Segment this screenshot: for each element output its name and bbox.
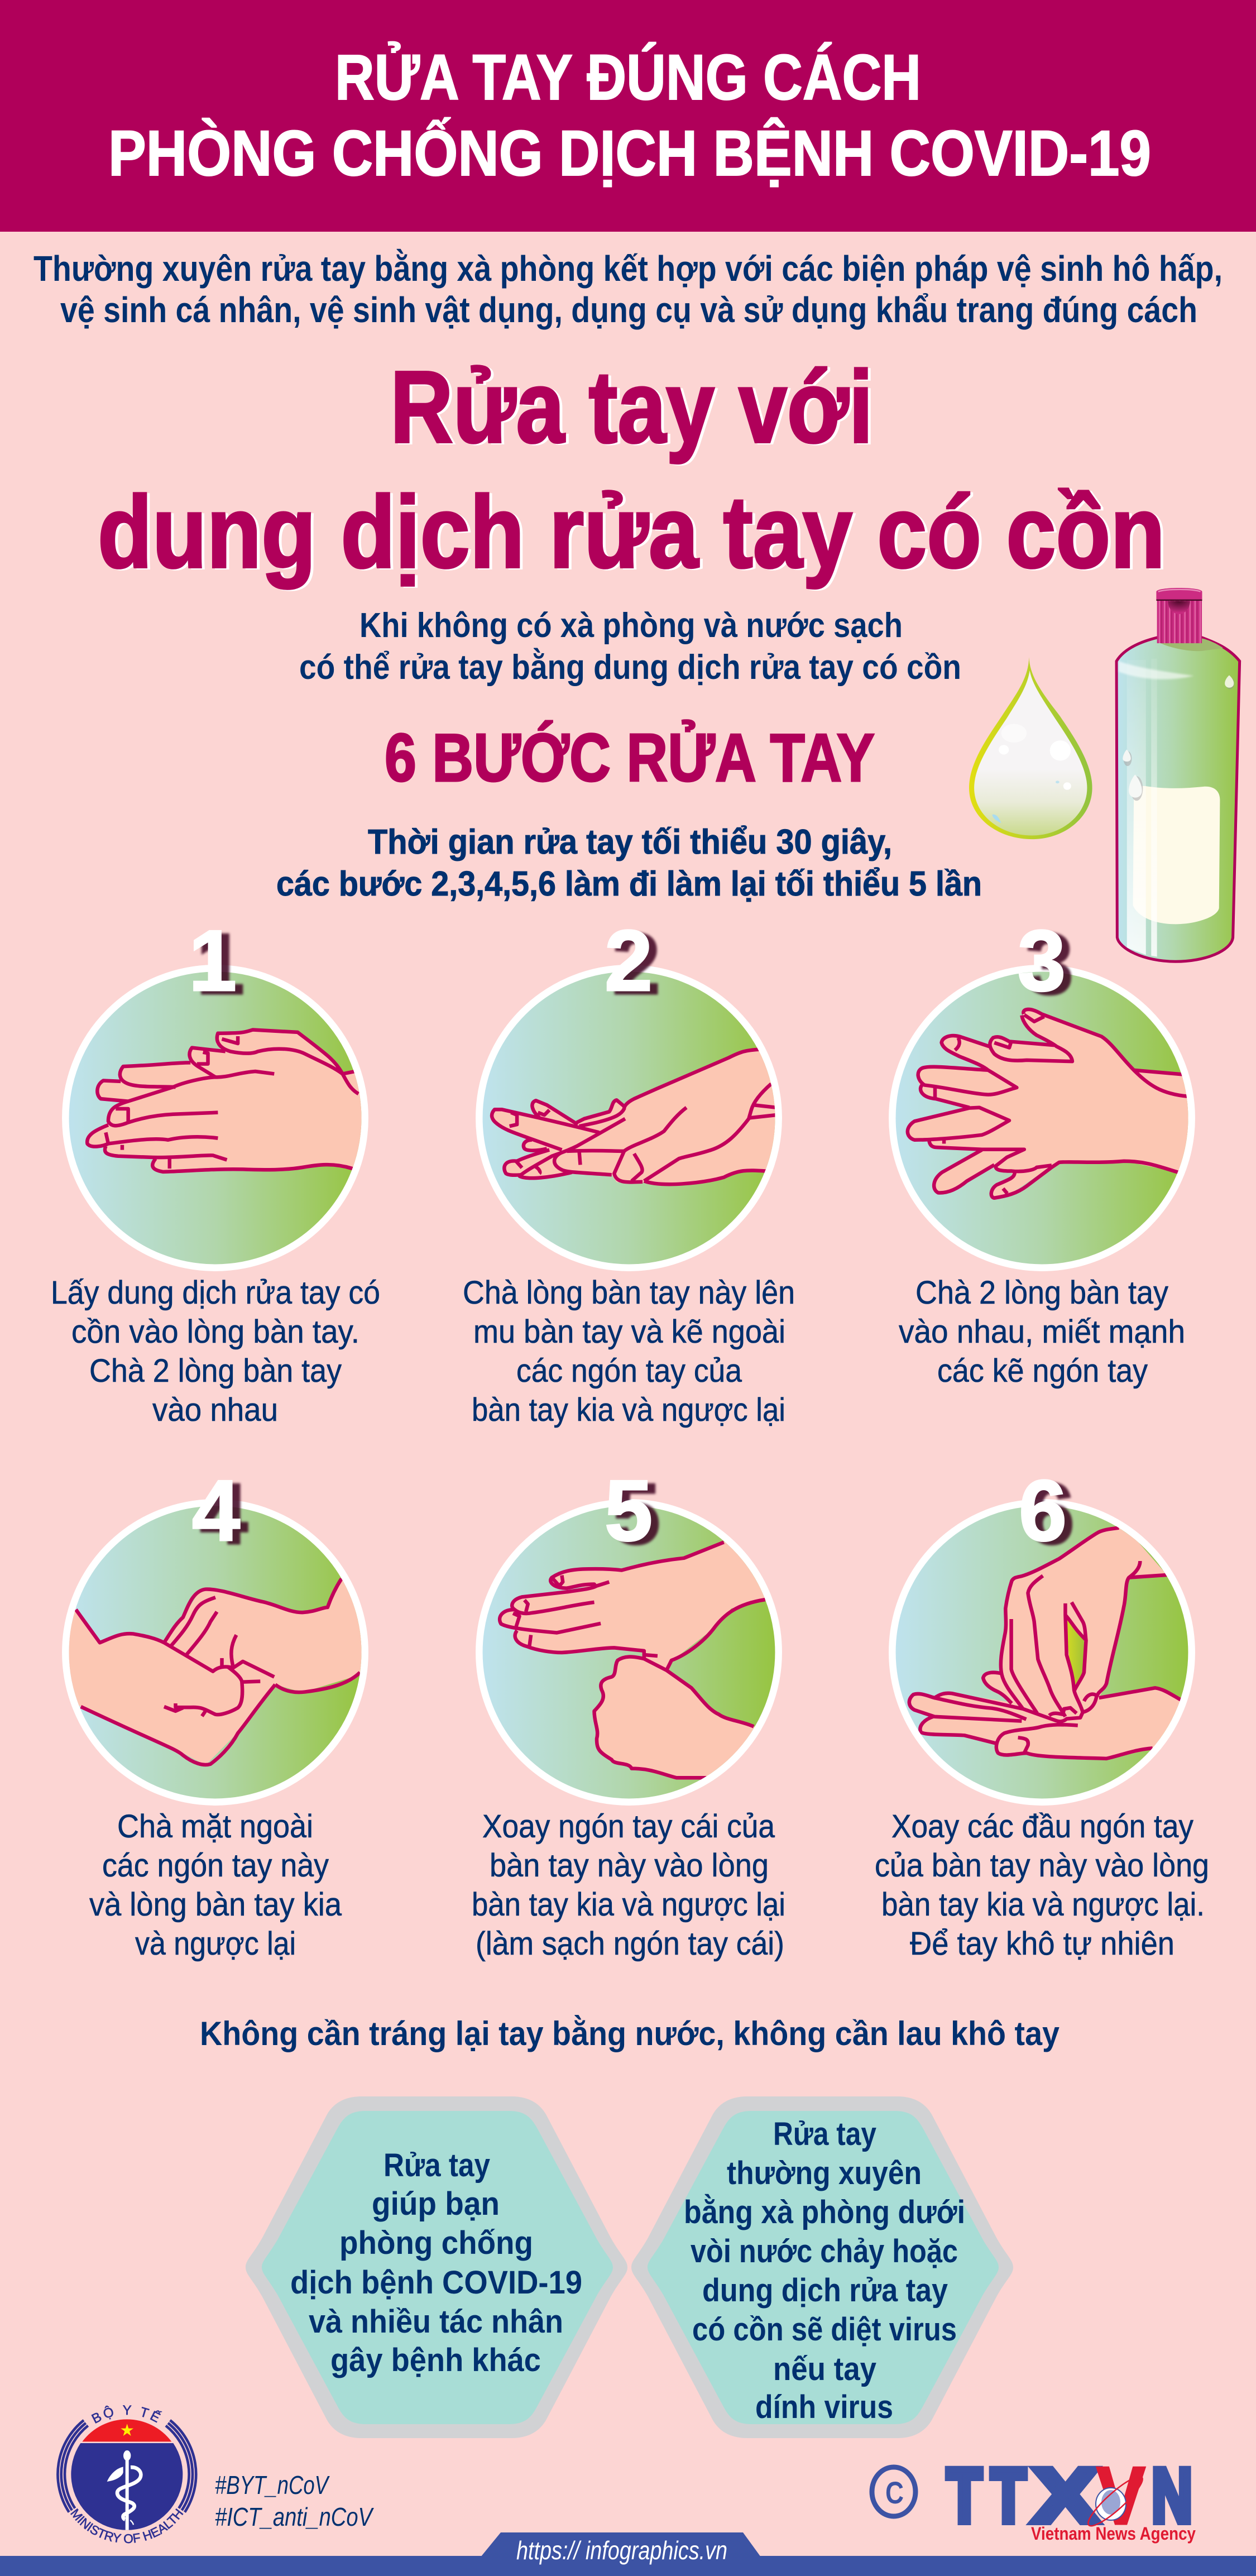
step 3 caption: Chà 2 lòng bàn tay (915, 1275, 1168, 1311)
step 5 circle (479, 1502, 779, 1802)
TTXVN letters: T (947, 2453, 982, 2539)
TTXVN letters: T (991, 2453, 1026, 2539)
step 5 hands (500, 1529, 781, 1778)
title: RỬA TAY ĐÚNG CÁCH (335, 42, 921, 113)
step 2 hands (492, 1050, 779, 1185)
step 6 number: 6 (1019, 1462, 1067, 1559)
step 3 caption (899, 1275, 1185, 1389)
hexagon left text: Rửa tay (383, 2147, 490, 2184)
step 3 hands (908, 1008, 1193, 1198)
bottle body (1116, 638, 1240, 961)
step 5 caption: bàn tay này vào lòng (490, 1847, 769, 1884)
panel: step 3 (892, 912, 1193, 1389)
header band (0, 0, 1256, 232)
logo rings (57, 2420, 196, 2512)
step 5 caption: bàn tay kia và ngược lại (472, 1886, 785, 1923)
step 3 caption: các kẽ ngón tay (937, 1353, 1148, 1389)
hashtags: #ICT_anti_nCoV (215, 2502, 375, 2531)
step 1 caption: cồn vào lòng bàn tay. (71, 1314, 359, 1350)
time note (276, 823, 982, 903)
bottle droplets (1123, 675, 1234, 801)
step 6 caption: bàn tay kia và ngược lại. (881, 1886, 1205, 1923)
step 4 circle (65, 1502, 365, 1802)
panel: step 1 (51, 912, 380, 1428)
copyright mark (872, 2467, 915, 2516)
step 1 caption: Lấy dung dịch rửa tay có (51, 1275, 380, 1311)
main heading (98, 349, 1165, 589)
logo star (121, 2424, 133, 2436)
hexagon left text (290, 2147, 582, 2378)
hexagon left border (246, 2096, 627, 2438)
step 6 caption: Xoay các đầu ngón tay (891, 1808, 1193, 1845)
TTXVN letters (947, 2453, 1192, 2539)
heading: 6 steps: 6 BƯỚC RỬA TAY (385, 720, 875, 796)
step 3 circle (892, 968, 1192, 1268)
step 1 number: 1 (189, 912, 237, 1009)
step 6 caption: của bàn tay này vào lòng (875, 1847, 1209, 1884)
step 5 caption (472, 1808, 785, 1962)
TTXVN letters: N (1152, 2453, 1192, 2539)
step 5 number: 5 (605, 1462, 653, 1559)
step 2 caption: mu bàn tay và kẽ ngoài (473, 1314, 785, 1350)
hexagon left text: gây bệnh khác (330, 2342, 541, 2378)
hexagon left text: dịch bệnh COVID-19 (290, 2264, 582, 2301)
website url: https:// infographics.vn (516, 2536, 727, 2565)
step 3 caption: vào nhau, miết mạnh (899, 1314, 1185, 1350)
hashtags (215, 2470, 375, 2531)
footer tab (481, 2532, 761, 2557)
panel: hexagon right (631, 2096, 1013, 2438)
hashtags: #BYT_nCoV (215, 2470, 330, 2500)
step 4 caption: Chà mặt ngoài (117, 1808, 313, 1845)
icon: Ministry of Health logo (56, 2405, 198, 2544)
logo red segment (82, 2419, 171, 2441)
step 6 hands (909, 1528, 1186, 1759)
icon: sanitizer bottle (1116, 588, 1240, 961)
hexagon right border (631, 2096, 1013, 2438)
panel: step 2 (463, 912, 795, 1428)
title: PHÒNG CHỐNG DỊCH BỆNH COVID-19 (108, 118, 1151, 189)
hexagon right fill (648, 2111, 999, 2424)
icon: sanitizer drop (969, 657, 1092, 839)
hexagon right text: nếu tay (773, 2351, 876, 2387)
step 2 caption (463, 1275, 795, 1428)
copyright mark: C (885, 2475, 904, 2510)
bottle highlights (1119, 659, 1194, 957)
panel: step 5 (472, 1462, 785, 1962)
agency name: Vietnam News Agency (1031, 2524, 1196, 2544)
hexagon right text: bằng xà phòng dưới (684, 2194, 965, 2230)
subheading: no soap (299, 606, 961, 687)
hexagon right text: thường xuyên (727, 2155, 922, 2191)
note: no rinsing: Không cần tráng lại tay bằng nước, không cần lau khô tay (200, 2015, 1060, 2052)
hexagon left text: phòng chống (339, 2225, 533, 2261)
time note: Thời gian rửa tay tối thiểu 30 giây, (368, 823, 892, 861)
step 6 caption: Để tay khô tự nhiên (910, 1926, 1174, 1962)
step 4 caption: và ngược lại (135, 1926, 296, 1962)
hexagon right text: dính virus (755, 2389, 893, 2425)
logo blue disc (71, 2443, 183, 2530)
step 1 caption: vào nhau (152, 1392, 278, 1428)
TTXVN logo (947, 2450, 1196, 2544)
intro text (33, 248, 1223, 330)
step 2 caption: Chà lòng bàn tay này lên (463, 1275, 795, 1311)
step 4 hands (59, 1579, 367, 1765)
step 4 caption: và lòng bàn tay kia (89, 1886, 342, 1923)
step 4 number: 4 (192, 1462, 240, 1559)
step 1 circle (65, 968, 365, 1268)
title (108, 42, 1151, 189)
bottle label (1133, 786, 1220, 924)
step 4 caption (89, 1808, 342, 1962)
panel: hexagon left (246, 2096, 627, 2438)
hexagon right text: có cồn sẽ diệt virus (692, 2311, 957, 2348)
step 5 caption: Xoay ngón tay cái của (482, 1808, 775, 1845)
hexagon right text: vòi nước chảy hoặc (691, 2233, 958, 2269)
globe (1083, 2471, 1148, 2531)
logo text bottom: MINISTRY OF HEALTH (70, 2508, 183, 2544)
hexagon left text: và nhiều tác nhân (309, 2304, 563, 2340)
footer band (0, 2556, 1256, 2576)
step 1 caption: Chà 2 lòng bàn tay (89, 1353, 342, 1389)
hexagon right text: dung dịch rửa tay (702, 2272, 948, 2309)
step 5 caption: (làm sạch ngón tay cái) (476, 1926, 784, 1962)
panel: step 4 (59, 1462, 367, 1962)
hexagon right text (684, 2116, 965, 2425)
step 2 caption: bàn tay kia và ngược lại (472, 1392, 785, 1428)
logo text top: BỘ Y TẾ (91, 2405, 162, 2424)
step 3 number: 3 (1018, 912, 1066, 1009)
cap shadow (1157, 638, 1223, 651)
step 2 caption: các ngón tay của (516, 1353, 742, 1389)
step 2 circle (479, 968, 779, 1268)
logo staff and snake (107, 2450, 141, 2530)
step 6 caption (875, 1808, 1209, 1962)
step 1 caption (51, 1275, 380, 1428)
TTXVN letters: X (1033, 2453, 1098, 2539)
hexagon right text: Rửa tay (773, 2116, 876, 2152)
step 6 circle (892, 1502, 1192, 1802)
hexagon left text: giúp bạn (372, 2186, 500, 2222)
hexagon left fill (262, 2111, 613, 2424)
TTXVN red V: V (1097, 2450, 1145, 2541)
step 4 caption: các ngón tay này (102, 1847, 329, 1884)
panel: step 6 (875, 1462, 1209, 1962)
time note: các bước 2,3,4,5,6 làm đi làm lại tối thiểu 5 lần (276, 865, 982, 903)
subheading: no soap: Khi không có xà phòng và nước sạch (359, 606, 903, 645)
step 1 hands (87, 1030, 367, 1172)
step 2 number: 2 (605, 912, 653, 1009)
main heading: Rửa tay với (390, 349, 873, 464)
cap (1156, 588, 1202, 643)
subheading: no soap: có thể rửa tay bằng dung dịch rửa tay có cồn (299, 648, 961, 687)
